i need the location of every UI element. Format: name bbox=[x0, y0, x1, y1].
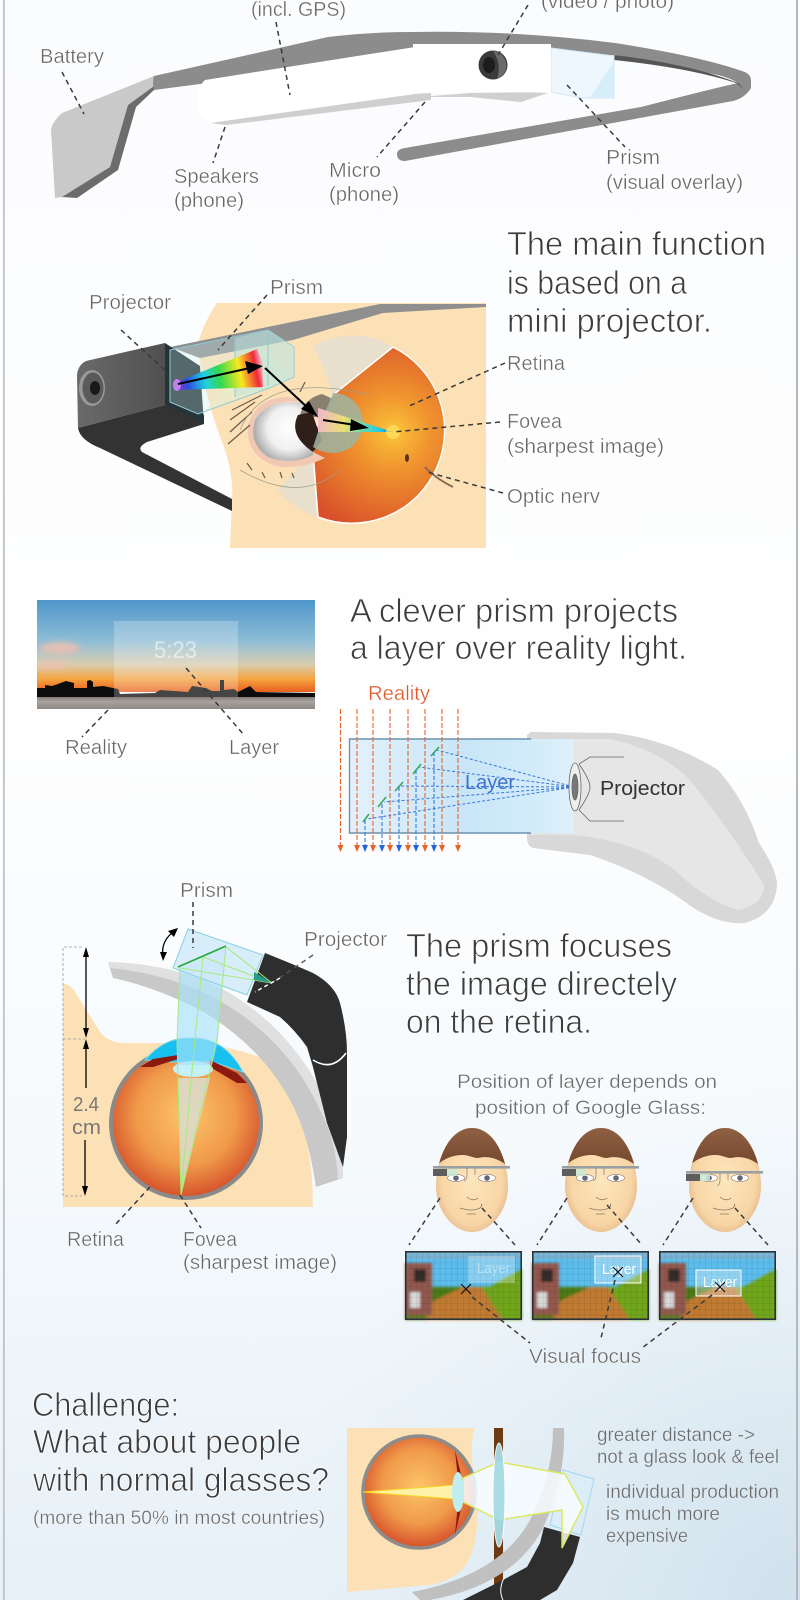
iris bbox=[295, 412, 322, 452]
label: fovea: Fovea bbox=[507, 411, 563, 433]
mirror bbox=[178, 946, 226, 967]
label: projector: Projector bbox=[89, 292, 171, 314]
face 1 bbox=[433, 1120, 510, 1232]
eye lens bbox=[452, 1472, 464, 1512]
iris upper bbox=[300, 394, 335, 418]
seam bbox=[501, 1578, 504, 1600]
prism bbox=[349, 739, 574, 833]
fovea glow bbox=[386, 425, 400, 439]
eyeball bbox=[253, 402, 313, 461]
glass band bbox=[412, 1428, 564, 1600]
lens bbox=[313, 393, 363, 453]
label: visual focus: Visual focus bbox=[529, 1346, 641, 1368]
diagram: prism to retina bbox=[63, 880, 387, 1274]
label: optic nerve: Optic nerv bbox=[507, 486, 600, 508]
text: greater distance: not a glass look & feel bbox=[597, 1447, 779, 1468]
faces and screens bbox=[405, 1120, 776, 1368]
illustration: Google Glass overview bbox=[40, 0, 751, 212]
rainbow beam bbox=[177, 349, 263, 390]
heading: challenge: What about people bbox=[33, 1423, 301, 1460]
text: position of layer: Position of layer depends on bbox=[457, 1072, 717, 1093]
heading: prism focuses: The prism focuses bbox=[406, 927, 672, 964]
label: prism: Prism bbox=[180, 880, 233, 902]
skin bbox=[197, 303, 486, 548]
heading: prism focuses: on the retina. bbox=[406, 1003, 592, 1040]
optic disc bbox=[405, 454, 409, 462]
screen 2 bbox=[532, 1251, 649, 1320]
screen 1: Layer bbox=[477, 1260, 510, 1277]
projector cone bbox=[254, 972, 272, 983]
screen 3 bbox=[659, 1251, 776, 1320]
prism bbox=[550, 1470, 594, 1535]
clouds bbox=[38, 642, 80, 669]
eyelid bbox=[248, 397, 325, 467]
beam in eye bbox=[318, 408, 393, 432]
glass band bbox=[108, 962, 343, 1187]
sky bbox=[37, 600, 315, 692]
heading: main function: is based on a bbox=[507, 264, 688, 301]
temple top bbox=[170, 304, 486, 358]
layer bbox=[114, 621, 238, 697]
heading: main function: mini projector. bbox=[507, 302, 712, 339]
label lines bbox=[82, 668, 244, 737]
label: micro: Micro bbox=[329, 160, 381, 182]
light rays bbox=[177, 947, 272, 1195]
black temple bbox=[463, 1527, 580, 1600]
beam source bbox=[173, 379, 181, 391]
projector lens bbox=[79, 370, 105, 406]
frame underside bbox=[614, 55, 745, 90]
light arrow bbox=[463, 1462, 583, 1548]
label lines bbox=[62, 5, 625, 163]
beam bbox=[177, 947, 226, 1065]
layer rays bbox=[367, 750, 574, 819]
label: projector: Projector bbox=[600, 778, 685, 800]
beam in eye bbox=[178, 1078, 210, 1195]
text: individual production: individual production bbox=[606, 1482, 779, 1503]
label: micro phone: (phone) bbox=[329, 184, 399, 206]
camera bbox=[478, 50, 508, 80]
label: speakers: Speakers bbox=[174, 166, 259, 188]
label: retina: Retina bbox=[507, 353, 566, 375]
label: reality: Reality bbox=[65, 737, 127, 759]
retina bbox=[313, 347, 445, 523]
photo: sunset with layer bbox=[37, 600, 315, 759]
heading: clever prism bbox=[350, 592, 687, 666]
heading: challenge bbox=[32, 1386, 329, 1498]
eyelashes bbox=[228, 382, 305, 478]
cornea bbox=[145, 1038, 243, 1072]
screen 3: Layer bbox=[703, 1274, 737, 1291]
iris bbox=[455, 1450, 462, 1535]
heading: prism focuses: the image directely bbox=[406, 965, 677, 1002]
heading: main function: The main function bbox=[507, 225, 766, 262]
glass band shade bbox=[108, 962, 343, 1180]
label lines bbox=[114, 902, 313, 1228]
eye bbox=[363, 1436, 475, 1548]
label: projector: Projector bbox=[304, 929, 387, 951]
skin bbox=[347, 1428, 478, 1592]
prism border bbox=[350, 739, 531, 833]
arrowheads bbox=[245, 361, 369, 431]
text: more than 50%: (more than 50% in most countries) bbox=[33, 1508, 325, 1529]
temple bbox=[247, 953, 347, 1167]
face 2 bbox=[562, 1120, 639, 1232]
projector lens bbox=[569, 757, 624, 821]
label: sharpest: (sharpest image) bbox=[183, 1252, 337, 1274]
heading: main function bbox=[507, 225, 766, 339]
eye bbox=[111, 1048, 261, 1198]
face 3 bbox=[686, 1120, 763, 1232]
orange arrows bbox=[340, 709, 458, 847]
text: greater distance: greater distance -> bbox=[597, 1425, 755, 1446]
optic nerve bbox=[425, 467, 453, 487]
projector front face bbox=[165, 343, 204, 424]
diagram: normal glasses bbox=[347, 1425, 779, 1600]
dimension arrows bbox=[85, 952, 86, 1191]
rear module bbox=[197, 47, 415, 123]
cone to eye bbox=[363, 1485, 454, 1499]
label lines bbox=[121, 295, 505, 493]
eyelid outline bbox=[240, 388, 370, 488]
label: speakers phone: (phone) bbox=[174, 190, 244, 212]
dimension lines bbox=[63, 947, 85, 1196]
blue arrows bbox=[365, 752, 434, 847]
label: fovea: Fovea bbox=[183, 1229, 238, 1251]
temple lower bbox=[78, 405, 232, 511]
prism cube bbox=[170, 330, 294, 414]
prism bbox=[551, 48, 614, 98]
label: prism: Prism bbox=[606, 147, 660, 169]
pale beam bbox=[203, 350, 294, 412]
frame bbox=[153, 32, 751, 161]
orange arrowheads bbox=[338, 845, 461, 852]
lens bbox=[173, 1061, 213, 1077]
temple inner bbox=[531, 739, 764, 910]
text: individual production: expensive bbox=[606, 1526, 688, 1547]
temple bbox=[527, 732, 777, 923]
arrows bbox=[178, 368, 355, 425]
front module bbox=[413, 44, 551, 94]
sclera bbox=[277, 335, 393, 517]
label: cm: cm bbox=[72, 1117, 101, 1139]
label: 2.4: 2.4 bbox=[73, 1094, 99, 1116]
label: layer: Layer bbox=[229, 737, 279, 759]
label lines bbox=[409, 1198, 768, 1348]
temple seam bbox=[313, 1053, 346, 1065]
battery bbox=[51, 76, 154, 198]
dimension arrowheads bbox=[82, 947, 89, 1196]
text: individual production: is much more bbox=[606, 1504, 720, 1525]
screen 2: Layer bbox=[602, 1261, 636, 1278]
diagram: prism light paths bbox=[338, 683, 777, 923]
label: battery: Battery bbox=[40, 46, 104, 68]
blue arrowheads bbox=[362, 845, 437, 852]
illustration: projector and eye bbox=[77, 277, 664, 548]
text: position of layer bbox=[457, 1072, 717, 1119]
cornea bbox=[453, 1450, 477, 1535]
heading: prism focuses bbox=[406, 927, 677, 1040]
prism bbox=[173, 929, 263, 995]
text: individual production bbox=[606, 1482, 779, 1547]
heading: challenge: Challenge: bbox=[32, 1386, 179, 1423]
water bbox=[37, 694, 315, 709]
skin bbox=[63, 983, 313, 1207]
heading: clever prism: A clever prism projects bbox=[350, 592, 678, 629]
glass lens bbox=[493, 1443, 505, 1547]
text: position of layer: position of Google Glass: bbox=[475, 1098, 706, 1119]
iris bbox=[140, 1055, 247, 1083]
label: retina: Retina bbox=[67, 1229, 125, 1251]
screen 1 bbox=[405, 1251, 522, 1320]
label: sharpest: (sharpest image) bbox=[507, 436, 664, 458]
label: reality: Reality bbox=[368, 683, 430, 705]
skyline bbox=[37, 680, 315, 697]
front module shadow bbox=[420, 92, 551, 102]
tilt arrow bbox=[160, 928, 178, 961]
glass frame bbox=[494, 1428, 503, 1600]
projector housing bbox=[77, 343, 165, 428]
clock: 5:23 bbox=[154, 637, 197, 664]
label: layer: Layer bbox=[465, 772, 515, 794]
rear module shadow bbox=[210, 90, 431, 125]
heading: challenge: with normal glasses? bbox=[32, 1461, 329, 1498]
heading: clever prism: a layer over reality light. bbox=[350, 629, 687, 666]
mirrors bbox=[363, 747, 439, 822]
battery shadow bbox=[62, 86, 154, 198]
text: greater distance bbox=[597, 1425, 779, 1468]
label: prism: Prism bbox=[270, 277, 323, 299]
label: visual overlay: (visual overlay) bbox=[606, 172, 743, 194]
